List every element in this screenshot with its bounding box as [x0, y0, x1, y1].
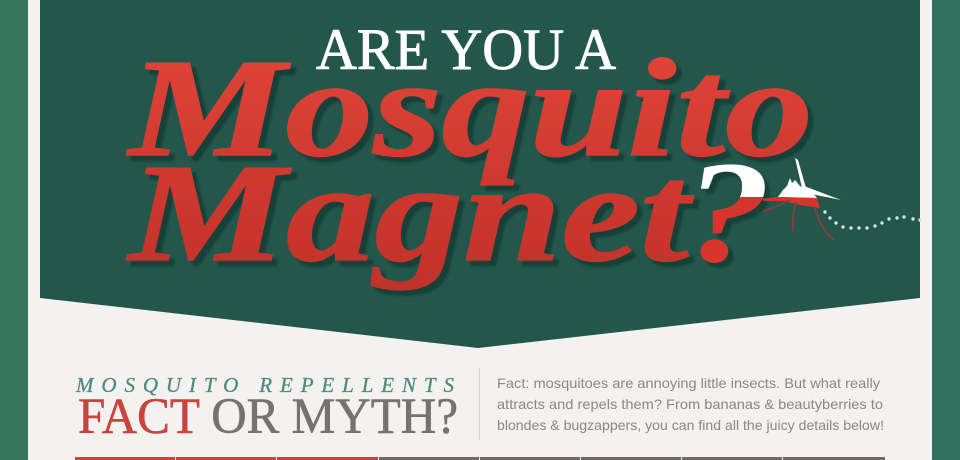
text block: intro: blondes & bugzappers, you can find all the juicy details below!	[497, 417, 884, 433]
title: question mark: ?	[690, 136, 776, 298]
progress bar: grey segments	[379, 457, 885, 460]
side band: right	[932, 0, 960, 460]
text block: intro: Fact: mosquitoes are annoying little insects. But what really	[497, 375, 880, 391]
title: Magnet: Magnet	[126, 136, 694, 291]
panel: green title banner	[40, 0, 920, 348]
title: Mosquito: Mosquito	[131, 36, 818, 191]
title: Magnet: Magnet	[131, 141, 699, 296]
heading: are you a: ARE YOU A	[316, 17, 616, 82]
progress bar: red segments	[75, 457, 378, 460]
text block: intro	[497, 375, 884, 433]
divider line	[479, 368, 480, 440]
text block: intro: attracts and repels them? From bananas & beautyberries to	[497, 396, 883, 412]
side band: left	[0, 0, 28, 460]
heading: mosquito repellents: MOSQUITO REPELLENTS	[75, 373, 454, 397]
title: Mosquito: Mosquito	[126, 31, 813, 186]
flight trail: dotted	[823, 210, 922, 230]
heading: fact or myth: FACT OR MYTH?	[78, 389, 458, 445]
title: question mark: ?	[685, 131, 771, 293]
icon: mosquito	[762, 158, 841, 240]
